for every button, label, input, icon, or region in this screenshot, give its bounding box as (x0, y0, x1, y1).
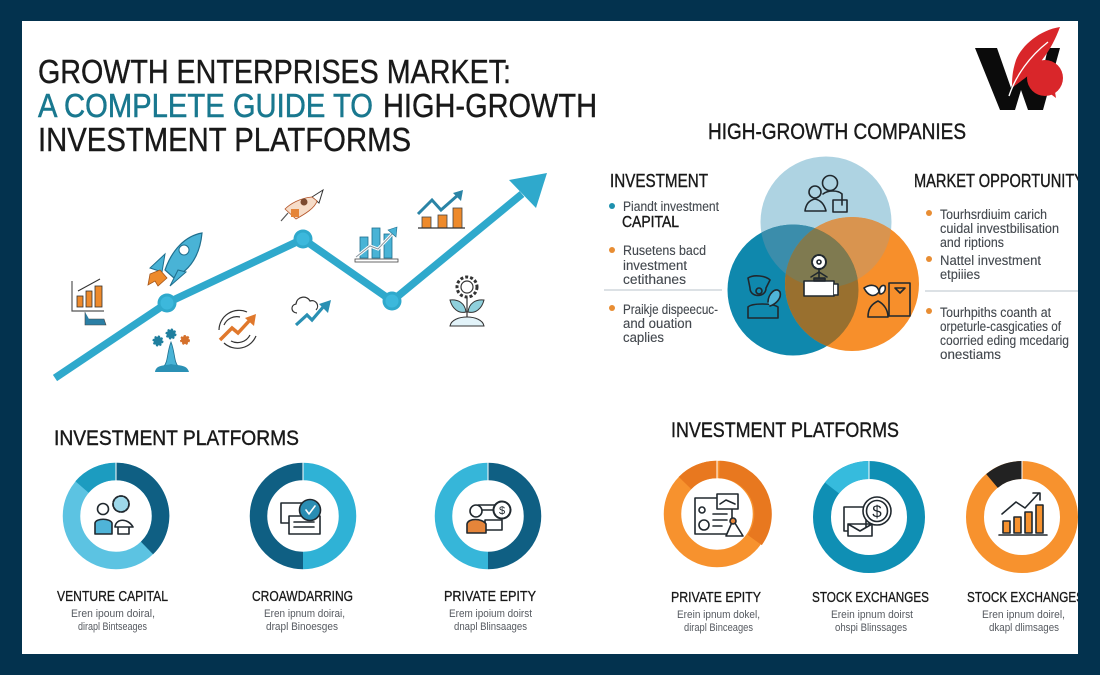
heading: investment platforms right: INVESTMENT PLATFORMS (671, 419, 899, 442)
label: venture capital (57, 589, 168, 633)
label: stock exchanges middle: Erein ipnum doirst (831, 609, 913, 621)
panel: market opportunity list (914, 171, 1084, 362)
label: stock exchanges right: Eren ipnum doirel, (982, 609, 1065, 621)
label: stock exchanges right (967, 590, 1084, 634)
icon: gear and case (804, 255, 838, 296)
icon: bars and rising arrow (999, 493, 1047, 535)
donut: stock exchanges right (975, 460, 1069, 564)
icon: cloud with arrow (292, 297, 331, 325)
icon: two people (95, 496, 133, 534)
title: GROWTH ENTERPRISES MARKET: (38, 53, 511, 90)
icon: bar chart report (72, 279, 106, 325)
icon: person and tablet (864, 283, 910, 317)
label: private equity right: Erein ipnum dokel, (677, 609, 760, 621)
icon: analyst (748, 276, 780, 318)
label: crowdfunding: drapl Binoesges (266, 621, 338, 633)
label: private equity left (444, 589, 536, 633)
venn overlaps (762, 217, 891, 346)
logo (975, 27, 1063, 110)
venn diagram (728, 156, 919, 356)
panel: investment list: Praikje dispeecuc- (623, 302, 718, 317)
label: stock exchanges middle: ohspi Blinssages (835, 622, 907, 634)
panel: investment list: and ouation (623, 316, 692, 331)
title: A COMPLETE GUIDE TO (38, 87, 373, 124)
panel: market opportunity list: etpiiies (940, 267, 980, 282)
label: stock exchanges middle: STOCK EXCHANGES (812, 590, 929, 606)
panel: market opportunity list: onestiams (940, 347, 1001, 362)
panel: investment list: cetithanes (623, 272, 686, 287)
label: private equity right: dirapl Binceages (684, 622, 753, 634)
panel: market opportunity list: orpeturle-casgicaties of (940, 319, 1061, 334)
panel: market opportunity list: Tourhpiths coanth at (940, 305, 1051, 320)
icon: documents with check (281, 500, 320, 534)
icon: investor and coin: $ (499, 505, 505, 517)
panel: investment list (604, 171, 722, 345)
panel: investment list: caplies (623, 330, 664, 345)
label: private equity right (671, 590, 761, 634)
donut: crowdfunding (258, 462, 348, 560)
icon: document with badge (695, 494, 743, 536)
donut: venture capital (72, 462, 161, 560)
label: private equity left: dnapl Blinsaages (454, 621, 527, 633)
panel: investment list: investment (623, 258, 687, 273)
label: venture capital: VENTURE CAPITAL (57, 589, 168, 605)
icon: launch pad (154, 330, 189, 372)
title: INVESTMENT PLATFORMS (38, 121, 411, 158)
icon: rocket (148, 233, 202, 286)
panel: market opportunity list: Nattel investment (940, 253, 1041, 268)
label: crowdfunding: Eren ipnum doirai, (264, 608, 345, 620)
title: HIGH-GROWTH (383, 87, 597, 124)
panel: market opportunity list: and riptions (940, 235, 1004, 250)
panel: market opportunity list: cuidal investbilisation (940, 221, 1059, 236)
panel: investment list: Piandt investment (623, 199, 719, 214)
label: crowdfunding: CROAWDARRING (252, 589, 353, 605)
icon: circular growth arrow (219, 310, 256, 348)
label: stock exchanges middle (812, 590, 929, 634)
icon: rising bars with arrow (355, 227, 398, 262)
label: private equity right: PRIVATE EPITY (671, 590, 761, 606)
label: stock exchanges right: dkapl dlimsages (989, 622, 1059, 634)
donut: private equity (444, 462, 532, 560)
label: venture capital: dirapl Bintseages (78, 621, 147, 633)
icon: gear plant (450, 277, 484, 326)
label: private equity left: PRIVATE EPITY (444, 589, 536, 605)
heading: investment platforms left: INVESTMENT PLATFORMS (54, 427, 299, 450)
icon: dollar coin and envelope: $ (872, 502, 882, 521)
icon: small rocket (281, 190, 323, 221)
donut: private equity right (672, 460, 765, 558)
panel: investment list: Rusetens bacd (623, 243, 706, 258)
label: crowdfunding (252, 589, 353, 633)
icon: orange bars with arrow (418, 190, 465, 228)
donut: stock exchanges (822, 460, 916, 564)
title (38, 53, 597, 158)
panel: market opportunity list: coorried eding mcedarig (940, 333, 1069, 348)
panel: market opportunity list: Tourhsrdiuim carich (940, 207, 1047, 222)
panel: investment list: CAPITAL (622, 214, 679, 231)
heading: high-growth companies: HIGH-GROWTH COMPANIES (708, 119, 966, 144)
label: venture capital: Eren ipoum doiral, (71, 608, 155, 620)
icon: people (805, 176, 847, 212)
growth line chart (55, 173, 547, 378)
label: private equity left: Erem ipoium doirst (449, 608, 532, 620)
panel: investment list: INVESTMENT (610, 171, 708, 191)
